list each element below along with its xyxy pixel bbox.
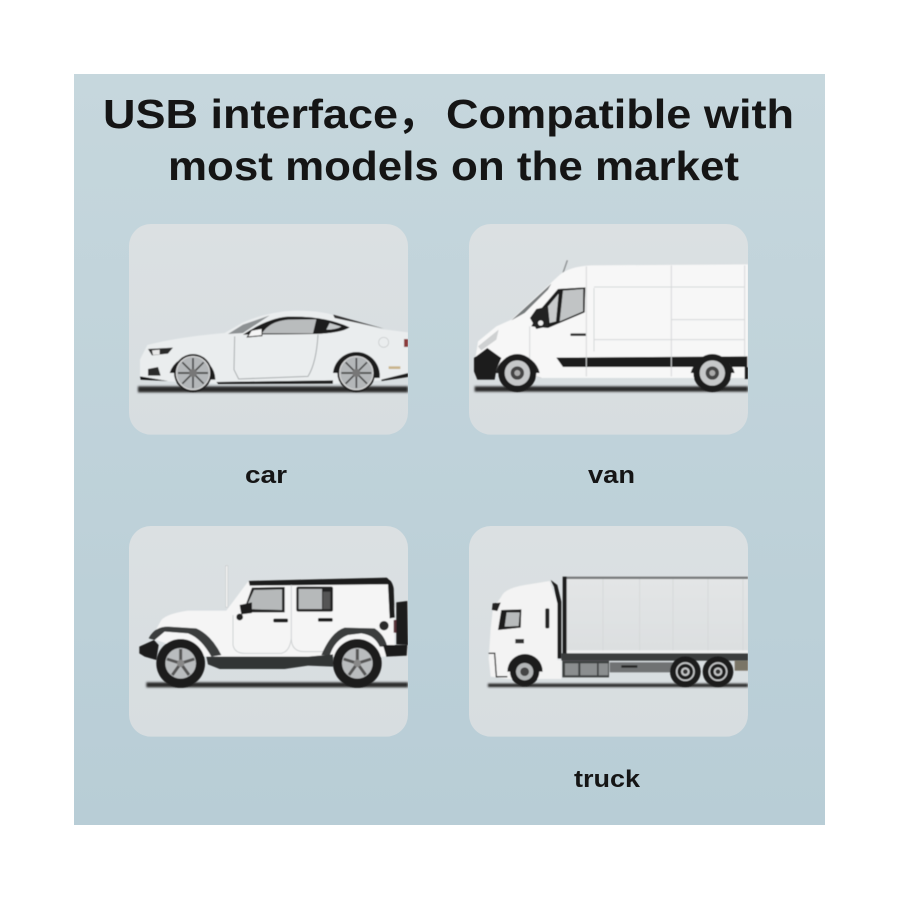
car wheels [170, 352, 380, 392]
panel: truck [469, 526, 748, 737]
van shadow [475, 386, 748, 392]
title: most models on the market [168, 143, 739, 189]
label: car: car [245, 462, 287, 489]
van illustration [474, 260, 748, 392]
title [103, 91, 794, 189]
truck illustration [489, 577, 748, 687]
truck wheels [507, 654, 733, 687]
label: van: van [588, 462, 635, 489]
title: Compatible with [446, 91, 794, 137]
car shadow [138, 386, 408, 392]
jeep wheels [156, 639, 382, 688]
infographic canvas [74, 74, 825, 825]
car illustration [140, 311, 408, 392]
title: USB interface [103, 91, 398, 137]
title: ， [397, 91, 438, 137]
jeep shadow [146, 682, 408, 687]
truck shadow [488, 684, 748, 687]
van wheels [495, 354, 735, 392]
panel: car [129, 224, 408, 435]
background panel [74, 74, 825, 825]
jeep illustration [139, 566, 408, 688]
label: truck: truck [574, 766, 641, 793]
panel: jeep [129, 526, 408, 737]
panel: van [469, 224, 748, 435]
